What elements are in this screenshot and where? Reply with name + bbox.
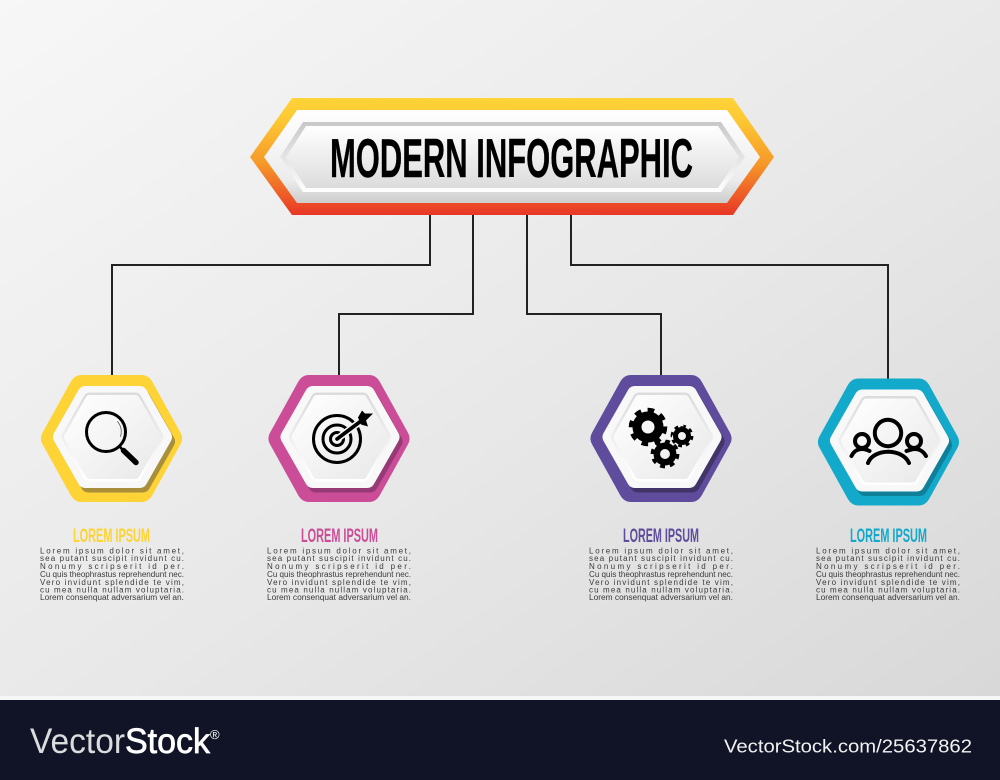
column text 1 xyxy=(40,526,184,602)
icon: magnifying glass xyxy=(86,412,136,462)
paragraph 4: Cu quis theophrastus reprehendunt nec. xyxy=(816,570,960,579)
paragraph 4 xyxy=(816,546,960,602)
column text 3 xyxy=(589,526,733,602)
paragraph 2: Cu quis theophrastus reprehendunt nec. xyxy=(267,570,411,579)
paragraph 2: cu mea nulla nullam voluptaria. xyxy=(267,586,411,594)
icon: target with arrow xyxy=(314,410,373,462)
paragraph 3: Lorem consenquat adversarium vel an. xyxy=(589,593,733,602)
paragraph 4: cu mea nulla nullam voluptaria. xyxy=(816,586,960,594)
paragraph 4: Nonumy scripserit id per. xyxy=(816,562,960,571)
paragraph 3: cu mea nulla nullam voluptaria. xyxy=(589,586,733,594)
paragraph 2: sea putant suscipit invidunt cu. xyxy=(267,554,411,563)
hexagon 3: purple xyxy=(602,387,720,490)
icon: group of people xyxy=(852,420,926,463)
paragraph 1 xyxy=(40,546,184,602)
paragraph 4: Lorem consenquat adversarium vel an. xyxy=(816,593,960,602)
paragraph 2: Nonumy scripserit id per. xyxy=(267,562,411,571)
paragraph 4: Lorem ipsum dolor sit amet, xyxy=(816,546,960,556)
paragraph 3: Nonumy scripserit id per. xyxy=(589,562,733,571)
label 4: LOREM IPSUM xyxy=(850,526,927,547)
paragraph 3: Vero invidunt splendide te vim, xyxy=(589,578,733,587)
paragraph 3 xyxy=(589,546,733,602)
paragraph 4: Vero invidunt splendide te vim, xyxy=(816,578,960,587)
paragraph 1: Nonumy scripserit id per. xyxy=(40,562,184,571)
footer bar xyxy=(0,700,1000,780)
footer logo: Vector xyxy=(30,722,125,761)
label 2: LOREM IPSUM xyxy=(301,526,378,547)
footer logo xyxy=(30,722,220,761)
footer logo: ® xyxy=(210,727,220,742)
paragraph 1: Cu quis theophrastus reprehendunt nec. xyxy=(40,570,184,579)
hexagon 1: yellow xyxy=(53,387,170,490)
hexagon 4: teal xyxy=(830,390,947,494)
paragraph 2 xyxy=(267,546,411,602)
paragraph 3: Lorem ipsum dolor sit amet, xyxy=(589,546,733,556)
icon: gears xyxy=(631,410,692,467)
paragraph 1: sea putant suscipit invidunt cu. xyxy=(40,554,184,563)
paragraph 1: Vero invidunt splendide te vim, xyxy=(40,578,184,587)
label 3: LOREM IPSUM xyxy=(623,526,699,547)
label 1: LOREM IPSUM xyxy=(73,526,150,547)
paragraph 4: sea putant suscipit invidunt cu. xyxy=(816,554,960,563)
paragraph 2: Lorem ipsum dolor sit amet, xyxy=(267,546,411,556)
paragraph 1: Lorem ipsum dolor sit amet, xyxy=(40,546,184,556)
title: MODERN INFOGRAPHIC xyxy=(330,127,693,189)
paragraph 1: cu mea nulla nullam voluptaria. xyxy=(40,586,184,594)
title banner xyxy=(250,98,774,215)
column text 4 xyxy=(816,526,960,602)
paragraph 2: Vero invidunt splendide te vim, xyxy=(267,578,411,587)
paragraph 3: Cu quis theophrastus reprehendunt nec. xyxy=(589,570,733,579)
paragraph 3: sea putant suscipit invidunt cu. xyxy=(589,554,733,563)
column text 2 xyxy=(267,526,411,602)
paragraph 2: Lorem consenquat adversarium vel an. xyxy=(267,593,411,602)
footer logo: Stock xyxy=(125,722,210,761)
white strip xyxy=(0,696,1000,700)
footer image id: VectorStock.com/25637862 xyxy=(724,736,972,756)
paragraph 1: Lorem consenquat adversarium vel an. xyxy=(40,593,184,602)
connector lines xyxy=(112,214,888,379)
hexagon 2: magenta xyxy=(280,387,398,490)
